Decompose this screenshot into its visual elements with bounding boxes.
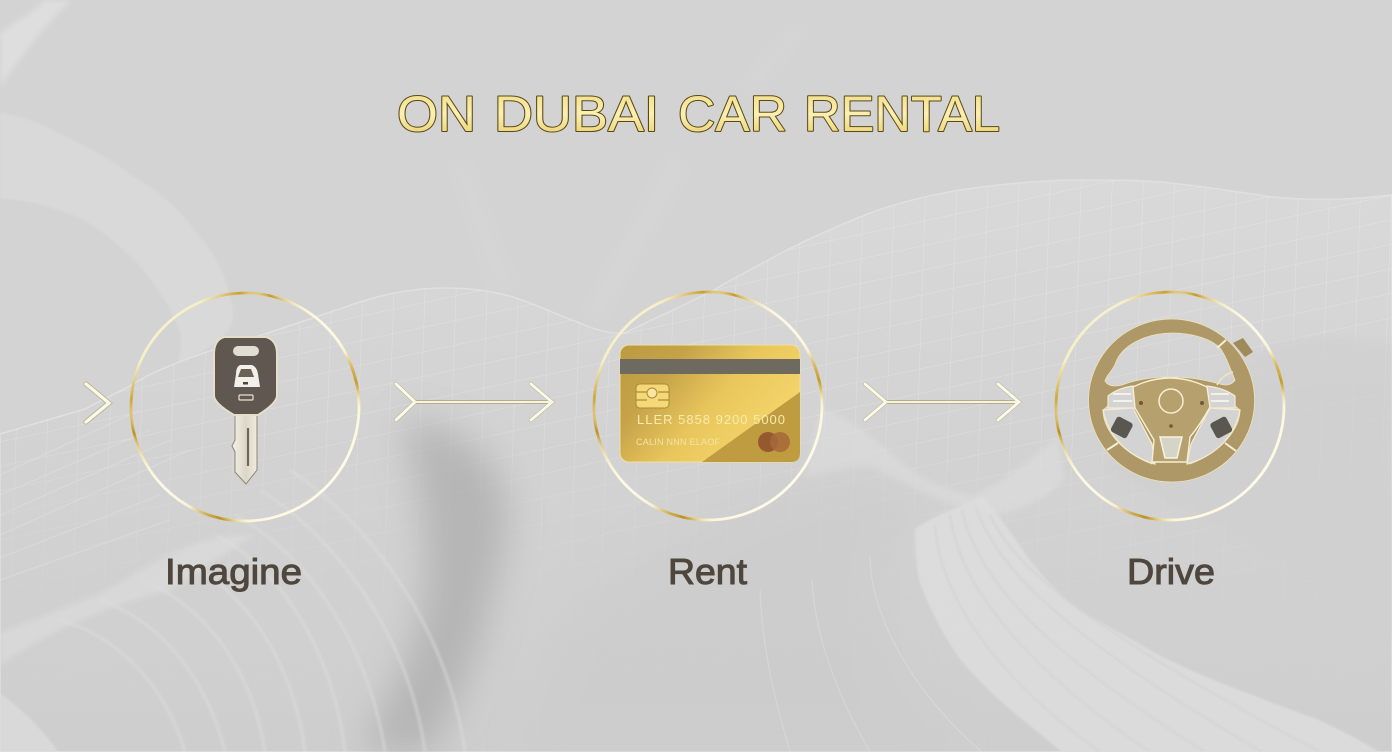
- arrow: card to wheel: [865, 384, 1019, 420]
- ring: wheel circle: [1056, 292, 1284, 520]
- ring: card circle: [594, 292, 822, 520]
- icon: car key: [214, 337, 277, 484]
- bright stripe ribbon lower right: [915, 496, 1379, 752]
- deep shadow fold: [360, 419, 507, 752]
- icon: steering wheel: [1089, 319, 1255, 482]
- ribbon behind key: [0, 113, 233, 363]
- arrow: entry chevron: [86, 384, 109, 422]
- step 1: Imagine: [131, 293, 359, 592]
- title: [397, 86, 1000, 142]
- crossing light bands near card: [804, 409, 1064, 515]
- label: Rent: Rent: [668, 551, 747, 592]
- label: Imagine: Imagine: [165, 551, 302, 592]
- left lower stripes: [0, 535, 254, 665]
- icon: gold credit card: CALIN NNN ELAOF: [636, 437, 720, 447]
- title: CAR: [678, 86, 787, 142]
- title: ON: [397, 86, 476, 142]
- icon: gold credit card: [620, 345, 800, 462]
- step 2: Rent: [594, 292, 822, 592]
- step 3: Drive: [1056, 292, 1284, 592]
- lower right grey fold: [1100, 337, 1392, 640]
- label: Drive: Drive: [1127, 551, 1215, 592]
- arrow: key to card: [396, 384, 552, 420]
- icon: gold credit card: LLER 5858 9200 5000: [637, 412, 785, 427]
- title: RENTAL: [804, 86, 1000, 142]
- ring: key circle: [131, 293, 359, 521]
- title: DUBAI: [494, 86, 659, 142]
